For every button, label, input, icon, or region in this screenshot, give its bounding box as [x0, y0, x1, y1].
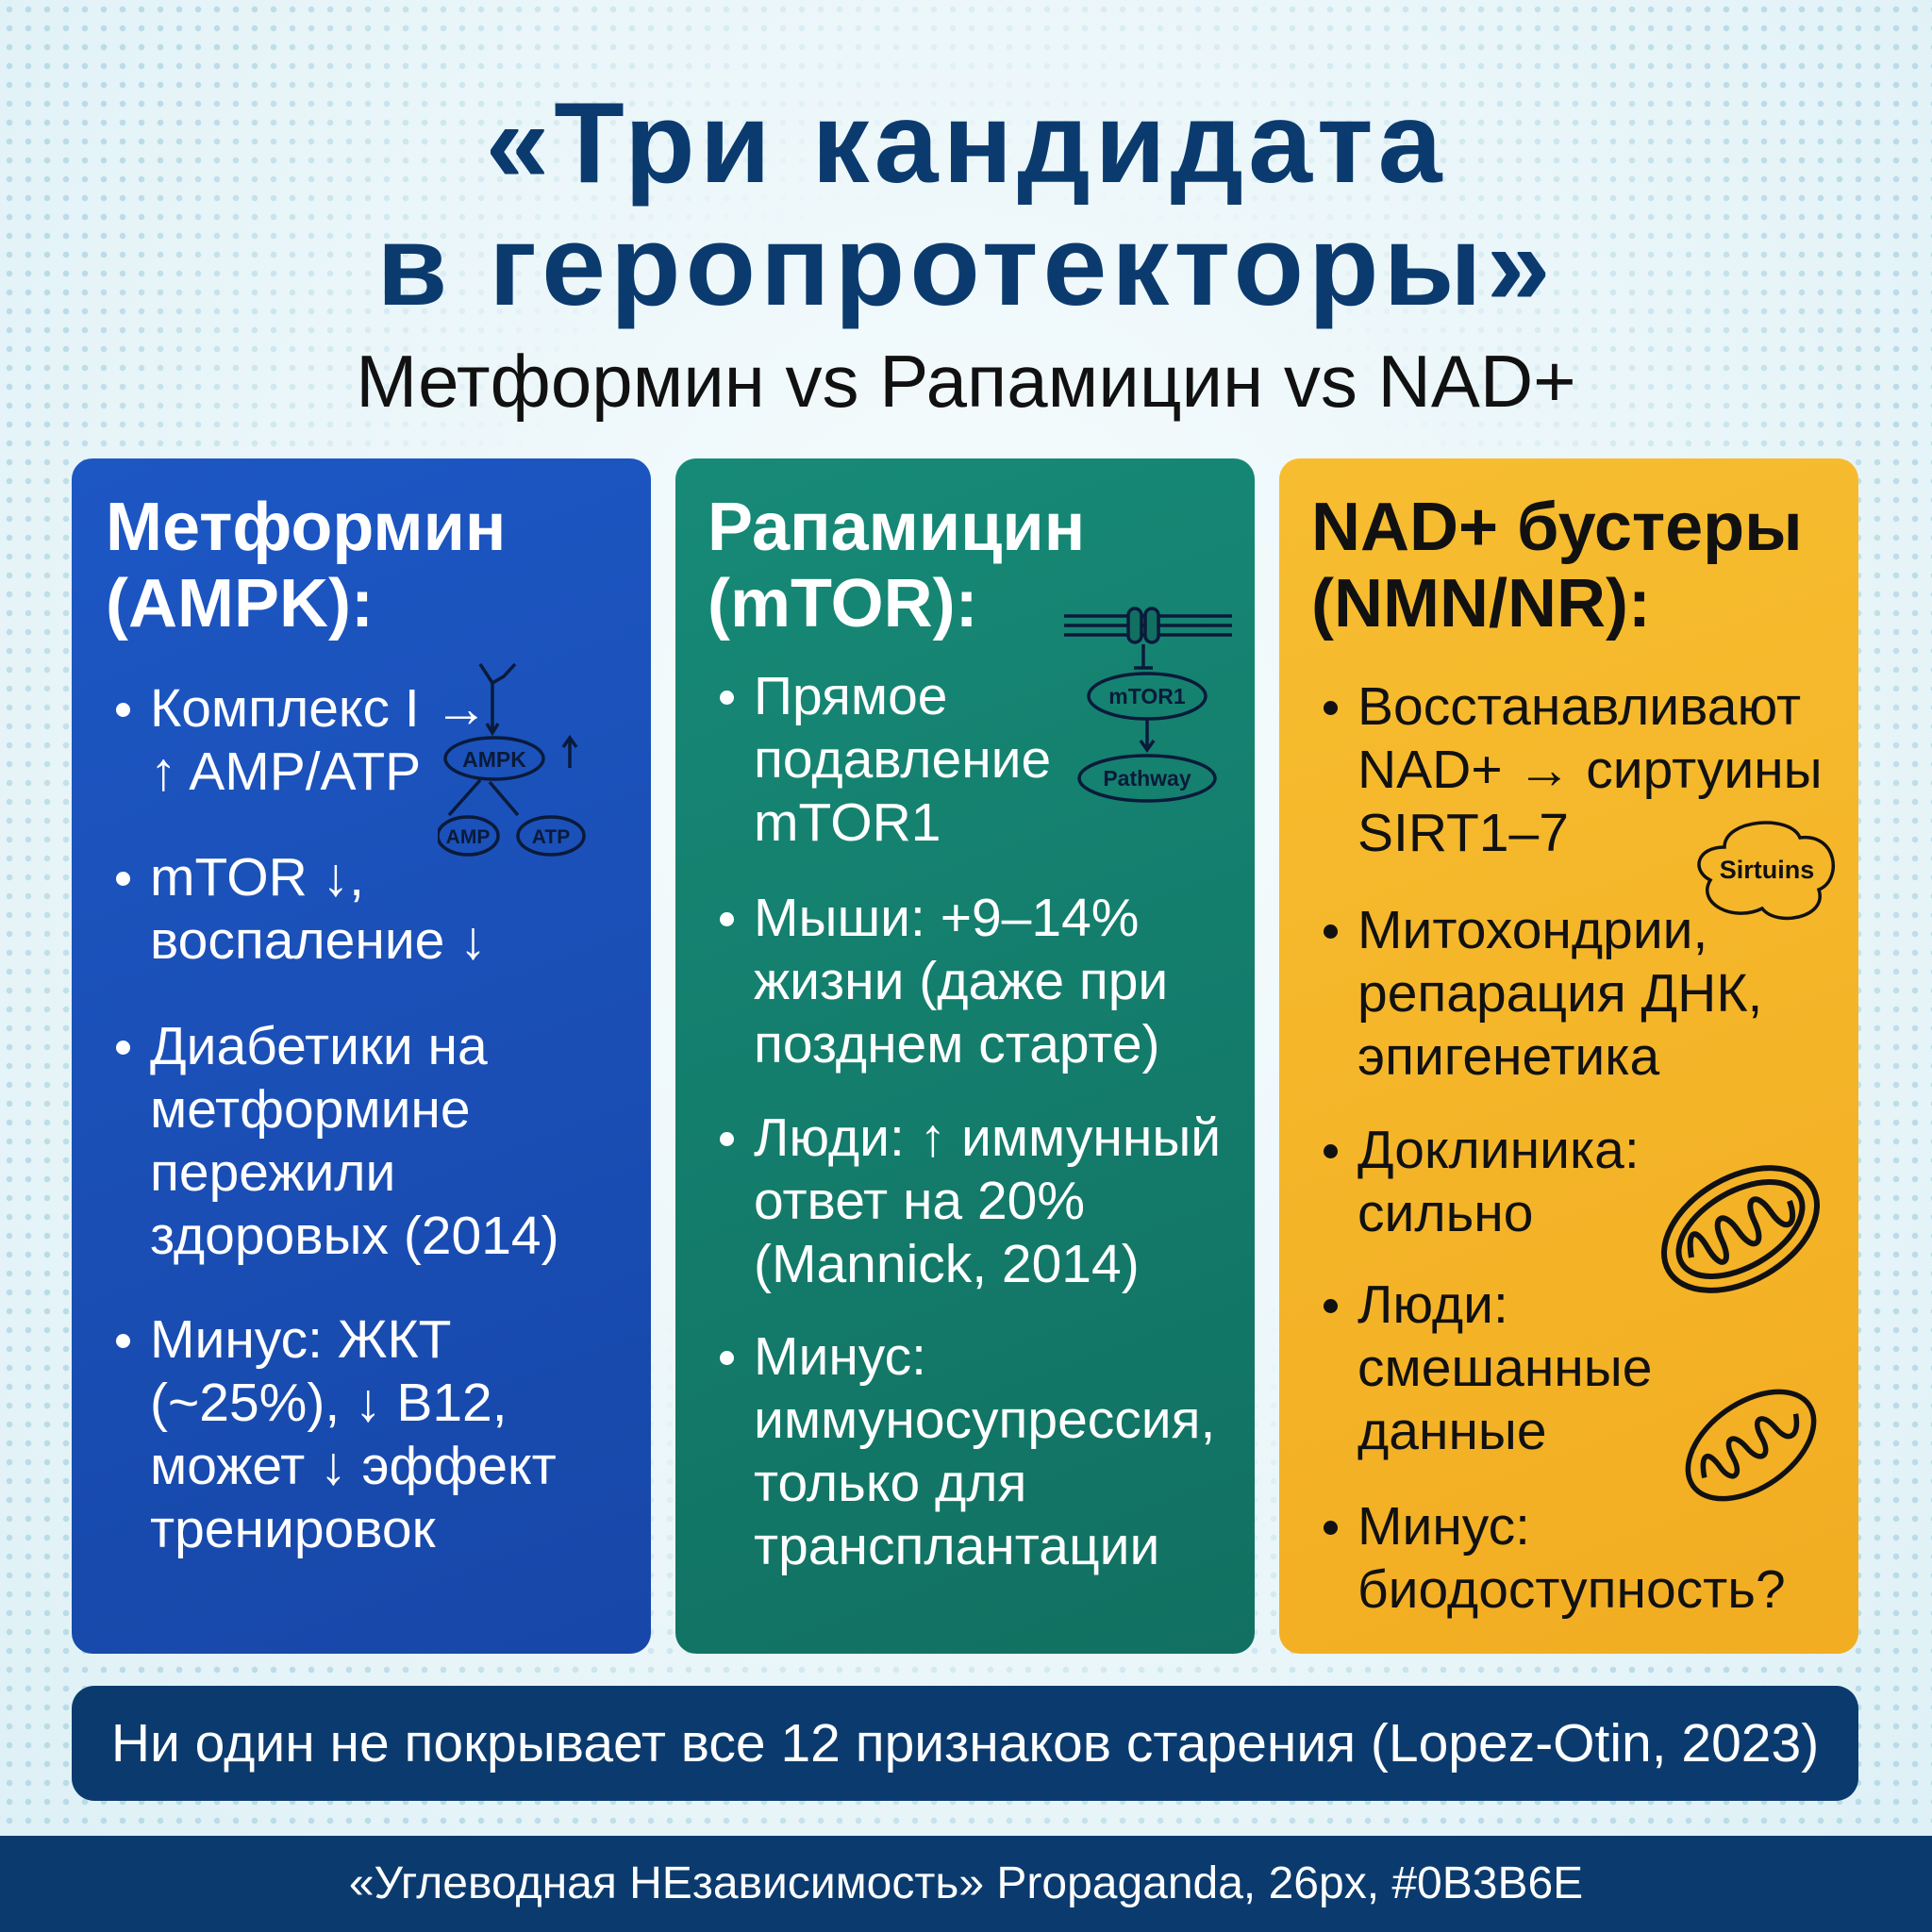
bullet 4: иммуносупрессия,	[754, 1390, 1215, 1450]
bullet 4: только для	[754, 1453, 1026, 1513]
icon: mitochondrion 2	[1685, 1389, 1817, 1502]
bullet 1	[1357, 675, 1823, 865]
heading: rapamycin	[708, 490, 1085, 641]
heading: rapamycin: Рапамицин	[708, 490, 1085, 565]
bullet 1: Комплекс I →	[150, 678, 489, 739]
bullet 4: может ↓ эффект	[150, 1436, 557, 1496]
footer	[0, 1836, 1932, 1932]
panel: metformin	[72, 458, 651, 1654]
footer: «Углеводная НЕзависимость» Propaganda, 26px, #0B3B6E	[349, 1858, 1583, 1908]
title: в геропротекторы»	[376, 201, 1556, 329]
bullet 4: Минус: ЖКТ	[150, 1309, 451, 1370]
icon: mitochondrion 1	[1660, 1165, 1820, 1293]
bullet 1: SIRT1–7	[1357, 803, 1569, 863]
bullet 5	[1357, 1495, 1786, 1622]
bullet 4: Минус:	[754, 1326, 926, 1387]
bullet 3	[754, 1107, 1221, 1296]
bullet 1: mTOR1	[754, 792, 941, 853]
bullet 3: Доклиника:	[1357, 1120, 1640, 1180]
bullet 2	[754, 887, 1168, 1076]
bullet 3: пережили	[150, 1142, 395, 1203]
bullet 5: Минус:	[1357, 1496, 1530, 1557]
bullet 1: ↑ AMP/ATP	[150, 741, 421, 802]
icon: AMPK diagram: AMPK	[462, 747, 526, 772]
bullet 3: здоровых (2014)	[150, 1206, 559, 1266]
bullet 2	[150, 846, 487, 973]
bullet 1: Восстанавливают	[1357, 676, 1801, 737]
title	[376, 78, 1556, 329]
bullet 4: смешанные	[1357, 1338, 1652, 1398]
bullet 4	[754, 1325, 1215, 1578]
bullet 4: Люди:	[1357, 1274, 1508, 1335]
bullet 3	[1357, 1119, 1640, 1245]
bullet 1	[754, 665, 1051, 855]
bullet 1: Прямое	[754, 666, 947, 726]
icon: sirtuins: Sirtuins	[1720, 856, 1814, 884]
panel: rapamycin	[675, 458, 1255, 1654]
heading: metformin: (AMPK):	[106, 566, 374, 641]
icon: mTOR pathway: mTOR1	[1108, 684, 1186, 708]
bullet 2: Митохондрии,	[1357, 900, 1707, 960]
bullet 3: ответ на 20%	[754, 1171, 1085, 1231]
icon: AMPK diagram: AMP	[446, 826, 490, 848]
icon: sirtuins	[1697, 821, 1836, 921]
bullet 2: репарация ДНК,	[1357, 963, 1762, 1024]
bullet 2: mTOR ↓,	[150, 847, 364, 908]
heading: NAD+: (NMN/NR):	[1311, 566, 1651, 641]
subtitle: Метформин vs Рапамицин vs NAD+	[356, 340, 1576, 423]
bullet 4	[150, 1308, 557, 1561]
heading: metformin: Метформин	[106, 490, 506, 565]
bullet 5: биодоступность?	[1357, 1559, 1786, 1620]
bullet 2: жизни (даже при	[754, 951, 1168, 1011]
panel: NAD+	[1279, 458, 1858, 1654]
bullet 2: Мыши: +9–14%	[754, 888, 1139, 948]
bullet 2: воспаление ↓	[150, 910, 487, 971]
icon: mTOR pathway	[1064, 607, 1232, 803]
bullet 4: трансплантации	[754, 1516, 1159, 1576]
heading: rapamycin: (mTOR):	[708, 566, 978, 641]
bullet 4	[1357, 1274, 1652, 1463]
bullet 3: Диабетики на	[150, 1016, 488, 1076]
bullet 3: (Mannick, 2014)	[754, 1234, 1140, 1294]
bottom conclusion bar: Ни один не покрывает все 12 признаков старения (Lopez-Otin, 2023)	[111, 1713, 1819, 1774]
icon: AMPK diagram	[438, 662, 586, 857]
icon: mTOR pathway: Pathway	[1103, 766, 1191, 791]
bullet 2	[1357, 899, 1762, 1089]
bullet 3: Люди: ↑ иммунный	[754, 1108, 1221, 1168]
bullet 2: позднем старте)	[754, 1014, 1160, 1074]
heading: NAD+: NAD+ бустеры	[1311, 490, 1803, 565]
heading: NAD+	[1311, 490, 1803, 641]
bullet 3: сильно	[1357, 1183, 1533, 1243]
bullet 4: тренировок	[150, 1499, 436, 1559]
bullet 1: NAD+ → сиртуины	[1357, 740, 1823, 800]
bullet 4: (~25%), ↓ B12,	[150, 1373, 508, 1433]
title: «Три кандидата	[485, 78, 1447, 207]
bottom conclusion bar	[72, 1686, 1858, 1801]
bullet 1	[150, 677, 489, 804]
bullet 2: эпигенетика	[1357, 1026, 1659, 1087]
bullet 3	[150, 1015, 559, 1268]
bullet 4: данные	[1357, 1401, 1547, 1461]
icon: AMPK diagram: ATP	[532, 826, 570, 848]
heading: metformin	[106, 490, 506, 641]
bullet 3: метформине	[150, 1079, 471, 1140]
bullet 1: подавление	[754, 729, 1051, 790]
